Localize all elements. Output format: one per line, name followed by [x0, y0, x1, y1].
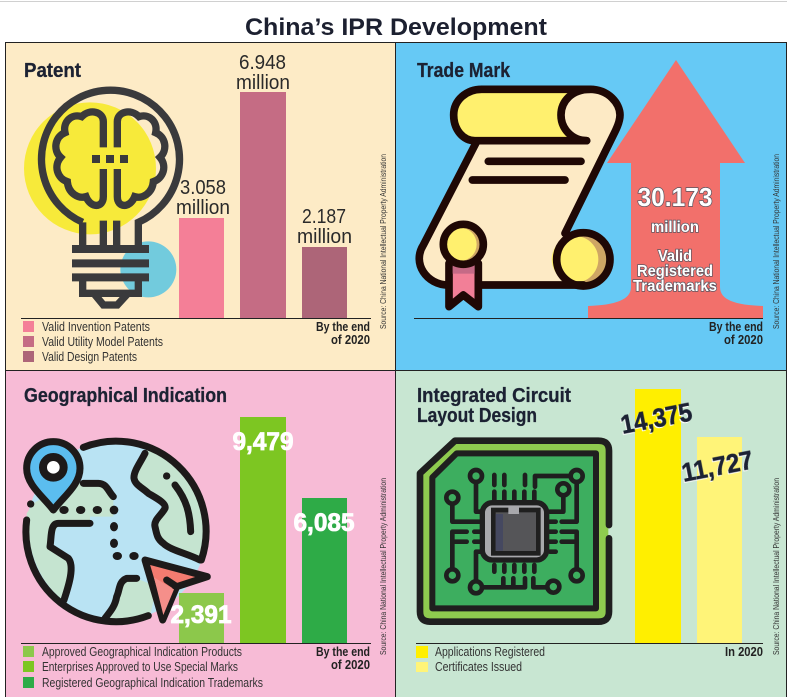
panel: integrated circuit layout design [396, 370, 786, 697]
icon: light bulb with brain [24, 90, 179, 305]
bar chart: patents: 2.187 [302, 206, 346, 228]
legend: patents: Valid Utility Model Patents [42, 335, 163, 349]
icon: scroll certificate [419, 89, 620, 307]
heading: integrated circuit layout design [417, 385, 571, 427]
date note: trade mark: of 2020 [724, 333, 763, 347]
heading: integrated circuit layout design: Integrated Circuit [417, 385, 571, 407]
legend: geographical indication: Approved Geographical Indication Products [42, 645, 242, 659]
date note: patent: By the end [316, 320, 370, 334]
value: valid registered trademarks: Trademarks [633, 278, 717, 295]
legend: geographical indication: Registered Geographical Indication Trademarks [42, 676, 263, 690]
bar chart: patents: 6.948 [239, 52, 286, 74]
icon: globe with pin and cursor [26, 441, 207, 622]
value: valid registered trademarks: million [651, 219, 699, 236]
bar chart: geographical indication: 6,085 [294, 509, 355, 537]
bar chart: patents: million [236, 72, 290, 94]
source: integrated circuit: Source: China National Intellectual Property Administration [772, 478, 781, 655]
bar chart: integrated circuit: 14,375 [618, 397, 694, 440]
bar chart: integrated circuit: 11,727 [679, 445, 755, 488]
date note: patent: of 2020 [331, 333, 370, 347]
source: trade mark: Source: China National Intellectual Property Administration [772, 154, 781, 329]
icon: circuit chip [420, 441, 609, 622]
legend: geographical indication [23, 645, 263, 690]
panel: trade mark [396, 42, 786, 370]
legend: integrated circuit [416, 645, 545, 674]
bar chart: patents: 3.058 [180, 177, 226, 199]
bar chart: geographical indication: 9,479 [232, 428, 294, 456]
date note: trade mark: By the end [709, 320, 763, 334]
heading: geographical indication: Geographical Indication [24, 385, 227, 407]
value: valid registered trademarks: Valid [658, 248, 692, 265]
legend: patents: Valid Design Patents [42, 350, 137, 364]
bar chart: geographical indication: 2,391 [170, 601, 232, 629]
heading: trade mark: Trade Mark [417, 60, 511, 82]
date note: trade mark [709, 320, 763, 347]
value: valid registered trademarks: Registered [637, 263, 713, 280]
legend: integrated circuit: Applications Registered [435, 645, 545, 659]
arrow: growth [588, 60, 763, 318]
bar chart: patents: million [297, 226, 352, 248]
heading: patent: Patent [24, 60, 81, 82]
source: patent: Source: China National Intellectual Property Administration [379, 154, 388, 329]
legend: patents [23, 320, 163, 364]
bar chart: geographical indication [21, 417, 371, 644]
legend: geographical indication: Enterprises Approved to Use Special Marks [42, 660, 238, 674]
source: geographical indication: Source: China National Intellectual Property Administration [379, 478, 388, 655]
date note: geographical indication: of 2020 [331, 658, 370, 672]
value: valid registered trademarks: 30.173 [638, 182, 712, 212]
value: valid registered trademarks [633, 182, 717, 295]
date note: patent [316, 320, 370, 347]
legend: patents: Valid Invention Patents [42, 320, 150, 334]
panel: patent [6, 42, 396, 370]
heading: integrated circuit layout design: Layout Design [417, 405, 537, 427]
date note: integrated circuit: In 2020 [725, 645, 763, 659]
bar chart: patents [21, 52, 371, 318]
date note: geographical indication [316, 645, 370, 672]
title: China’s IPR Development [245, 14, 547, 41]
panel: geographical indication [6, 370, 396, 697]
date note: geographical indication: By the end [316, 645, 370, 659]
bar chart: integrated circuit [416, 389, 763, 644]
bar chart: patents: million [176, 197, 230, 219]
legend: integrated circuit: Certificates Issued [435, 660, 522, 674]
